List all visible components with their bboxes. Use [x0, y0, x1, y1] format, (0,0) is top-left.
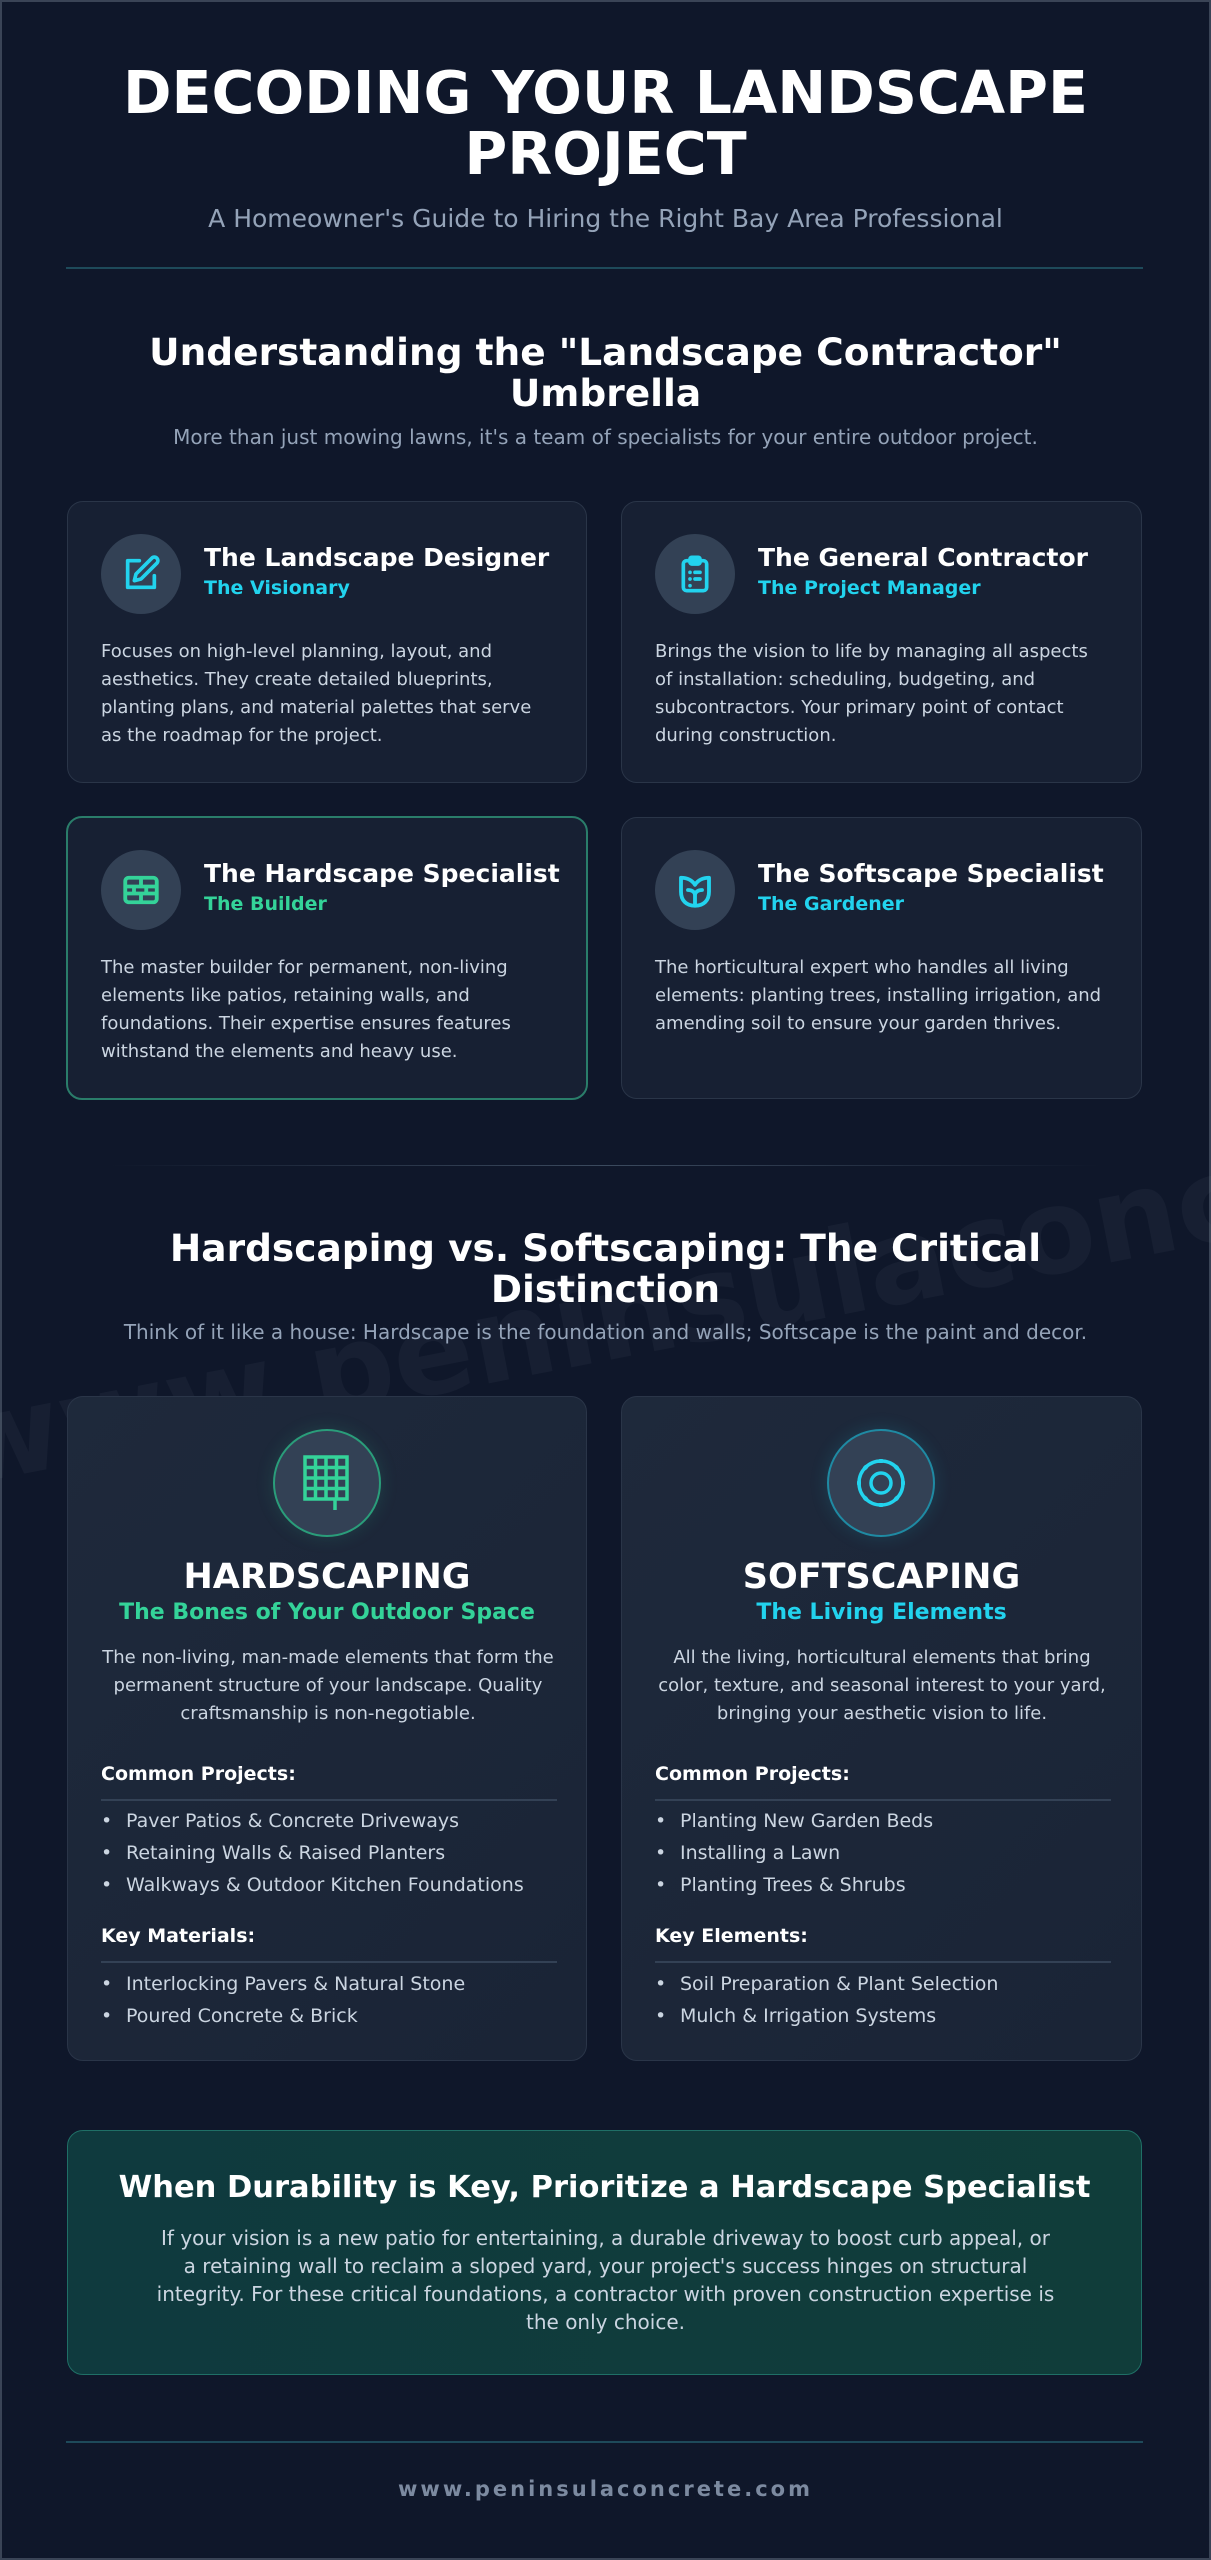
panel: softscaping: Common Projects: — [655, 1763, 850, 1785]
card: general contractor — [621, 501, 1142, 783]
panel: hardscaping: • — [101, 1973, 112, 1995]
panel: hardscaping: HARDSCAPING — [183, 1557, 471, 1597]
section heading: hardscaping vs softscaping: Distinction — [491, 1267, 720, 1311]
card: hardscape specialist — [66, 816, 588, 1100]
panel: softscaping: Mulch & Irrigation Systems — [680, 2005, 936, 2027]
card: general contractor: The Project Manager — [758, 577, 981, 599]
card: softscape specialist: The Gardener — [758, 893, 904, 915]
card: landscape designer: The Landscape Designer — [204, 543, 549, 572]
panel: hardscaping: Interlocking Pavers & Natural Stone — [126, 1973, 465, 1995]
section heading: umbrella: Umbrella — [510, 371, 701, 415]
card: softscape specialist: The horticultural expert who handles all living elements: planting trees, installing irrigation, and amending soil to ensure your garden thrives. — [655, 957, 1101, 1034]
callout: durability — [67, 2130, 1142, 2375]
panel: hardscaping: • — [101, 1874, 112, 1896]
section heading: umbrella — [149, 330, 1062, 415]
card: general contractor: Brings the vision to life by managing all aspects of installation: scheduling, budgeting, and subcontractors. Your primary point of contact during construction. — [655, 641, 1088, 746]
panel: softscaping: SOFTSCAPING — [743, 1557, 1020, 1597]
title: PROJECT — [464, 120, 747, 188]
callout text: If your vision is a new patio for entertaining, a durable driveway to boost curb appeal, or a retaining wall to reclaim a sloped yard, your project's success hinges on structural integrity. For these critical foundations, a contractor with proven construction expertise is the only choice. — [157, 2226, 1054, 2334]
card: general contractor: The General Contractor — [758, 543, 1088, 572]
panel: hardscaping: • — [101, 1810, 112, 1832]
panel: hardscaping: The non-living, man-made elements that form the permanent structure of your landscape. Quality craftsmanship is non-negotiable. — [102, 1647, 554, 1724]
icon: gear flower — [827, 1429, 935, 1537]
panel: softscaping: Planting New Garden Beds — [680, 1810, 933, 1832]
panel: softscaping — [621, 1396, 1142, 2061]
card: hardscape specialist: The Hardscape Specialist — [204, 859, 560, 888]
panel: softscaping: All the living, horticultural elements that bring color, texture, and seasonal interest to your yard, bringing your aesthetic vision to life. — [658, 1647, 1106, 1724]
section heading: hardscaping vs softscaping: Hardscaping vs. Softscaping: The Critical — [170, 1226, 1041, 1270]
panel: softscaping: Key Elements: — [655, 1925, 808, 1947]
card: softscape specialist: The Softscape Specialist — [758, 859, 1104, 888]
panel: softscaping: The Living Elements — [756, 1600, 1007, 1625]
card: softscape specialist — [621, 817, 1142, 1099]
panel: hardscaping: • — [101, 1842, 112, 1864]
panel: softscaping: • — [655, 1842, 666, 1864]
panel: hardscaping: Poured Concrete & Brick — [126, 2005, 358, 2027]
footer: www.peninsulaconcrete.com — [398, 2477, 813, 2501]
panel: hardscaping: Key Materials: — [101, 1925, 255, 1947]
icon: pencil — [101, 534, 181, 614]
panel: softscaping: Installing a Lawn — [680, 1842, 840, 1864]
panel: hardscaping — [67, 1396, 587, 2061]
card: hardscape specialist: The Builder — [204, 893, 327, 915]
panel: softscaping: Soil Preparation & Plant Selection — [680, 1973, 998, 1995]
panel: hardscaping: Retaining Walls & Raised Planters — [126, 1842, 445, 1864]
section heading: umbrella: Understanding the "Landscape Contractor" — [149, 330, 1062, 374]
panel: hardscaping: Common Projects: — [101, 1763, 296, 1785]
card: landscape designer: Focuses on high-level planning, layout, and aesthetics. They create detailed blueprints, planting plans, and material palettes that serve as the roadmap for the project. — [101, 641, 531, 746]
section subtitle: More than just mowing lawns, it's a team of specialists for your entire outdoor project. — [173, 425, 1038, 449]
callout heading: When Durability is Key, Prioritize a Hardscape Specialist — [119, 2170, 1090, 2205]
icon: clipboard — [655, 534, 735, 614]
title: DECODING YOUR LANDSCAPE — [123, 59, 1088, 127]
panel: hardscaping: Walkways & Outdoor Kitchen Foundations — [126, 1874, 524, 1896]
icon: leaf — [655, 850, 735, 930]
panel: softscaping: • — [655, 1874, 666, 1896]
card: landscape designer — [67, 501, 587, 783]
subtitle: A Homeowner's Guide to Hiring the Right Bay Area Professional — [208, 204, 1003, 233]
title — [123, 59, 1088, 188]
card: landscape designer: The Visionary — [204, 577, 350, 599]
panel: hardscaping: The Bones of Your Outdoor Space — [119, 1600, 535, 1625]
panel: softscaping: Planting Trees & Shrubs — [680, 1874, 906, 1896]
section heading: hardscaping vs softscaping — [170, 1226, 1041, 1311]
icon: grid — [273, 1429, 381, 1537]
panel: softscaping: • — [655, 1973, 666, 1995]
panel: hardscaping: • — [101, 2005, 112, 2027]
panel: softscaping: • — [655, 1810, 666, 1832]
panel: softscaping: • — [655, 2005, 666, 2027]
icon: bricks — [101, 850, 181, 930]
card: hardscape specialist: The master builder for permanent, non-living elements like patios, retaining walls, and foundations. Their expertise ensures features withstand the elements and heavy use. — [101, 957, 511, 1062]
panel: hardscaping: Paver Patios & Concrete Driveways — [126, 1810, 459, 1832]
section subtitle: Think of it like a house: Hardscape is the foundation and walls; Softscape is the paint and decor. — [124, 1320, 1087, 1344]
